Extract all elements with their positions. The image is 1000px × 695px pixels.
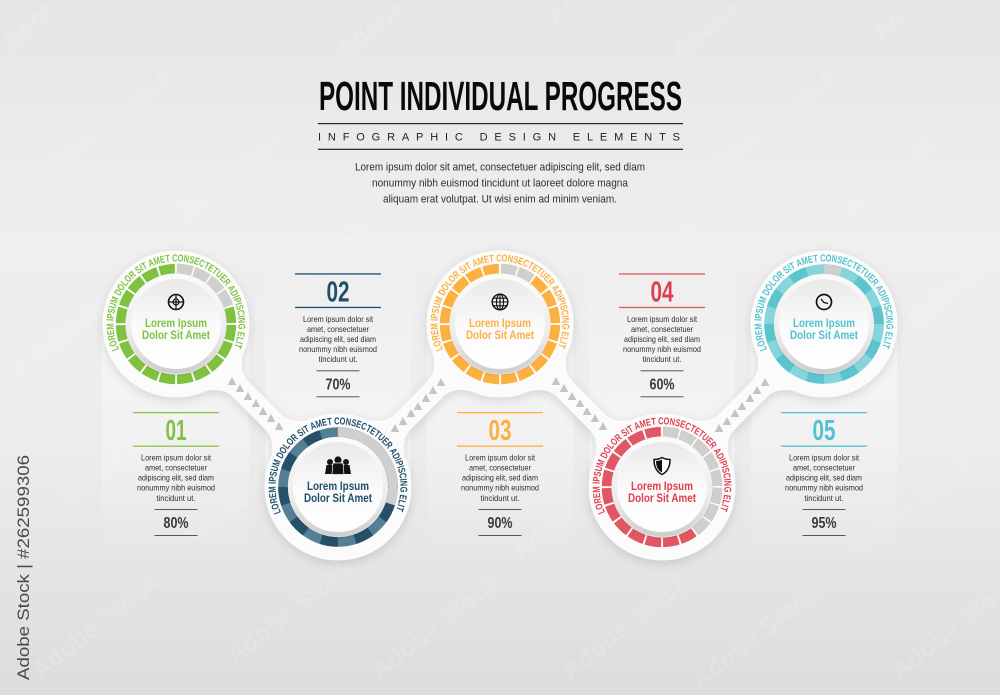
intro paragraph: nonummy nibh euismod tincidunt ut laoreet dolore magna [372, 178, 629, 190]
arrows: step 2 to 3 [391, 378, 445, 432]
watermark: Adobe Stock [836, 104, 974, 220]
hub [288, 438, 388, 536]
text block 05: 05 [812, 415, 836, 447]
text block 02: tincidunt ut. [318, 354, 358, 364]
white connector track and discs [102, 250, 898, 560]
hub label: Lorem Ipsum [145, 316, 207, 330]
text block 02: nonummy nibh euismod [299, 344, 377, 354]
intro paragraph: Lorem ipsum dolor sit amet, consectetuer adipiscing elit, sed diam [355, 162, 645, 174]
text block 01: adipiscing elit, sed diam [138, 473, 214, 483]
curved caption: LOREM IPSUM DOLOR SIT AMET CONSECTETUER ADIPISCING ELIT [754, 254, 894, 352]
progress ring 95% [769, 269, 879, 379]
hub label: Lorem Ipsum [307, 479, 369, 493]
text block 02 [295, 273, 381, 397]
text block 03: 03 [488, 415, 512, 447]
text block 04: adipiscing elit, sed diam [624, 334, 700, 344]
text block 01: tincidunt ut. [156, 493, 196, 503]
text block 05: 95% [812, 515, 836, 532]
watermark: Adobe Stock [221, 554, 359, 670]
text block 03: Lorem ipsum dolor sit [465, 453, 536, 463]
text block 05: nonummy nibh euismod [785, 483, 863, 493]
icon: globe [492, 294, 508, 310]
text block 02: 02 [326, 276, 350, 308]
text block 02: Lorem ipsum dolor sit [303, 314, 374, 324]
column panels [102, 250, 897, 564]
intro paragraph [355, 162, 645, 206]
stock id side label: Adobe Stock | #262599306 [14, 455, 33, 680]
text block 05: tincidunt ut. [804, 493, 844, 503]
hub label [628, 479, 696, 505]
text block 05: Lorem ipsum dolor sit [789, 453, 860, 463]
text block 04: Lorem ipsum dolor sit [627, 314, 698, 324]
text block 04: 60% [650, 376, 674, 393]
watermark: Adobe Stock [171, 109, 309, 225]
text block 05 [781, 412, 867, 536]
hub label: Lorem Ipsum [631, 479, 693, 493]
hub [774, 274, 874, 374]
watermark: Adobe Stock [41, 64, 179, 180]
text block 01: 80% [164, 515, 188, 532]
text block 02: adipiscing elit, sed diam [300, 334, 376, 344]
icon: clock [816, 294, 832, 310]
hub label: Dolor Sit Amet [142, 328, 210, 342]
hub [612, 438, 712, 536]
text block 04: 04 [650, 276, 674, 308]
watermark: Adobe Stock [366, 569, 504, 685]
curved caption: LOREM IPSUM DOLOR SIT AMET CONSECTETUER ADIPISCING ELIT [268, 417, 408, 515]
text block 02: amet, consectetuer [307, 324, 369, 334]
text block 02: 70% [326, 376, 350, 393]
progress ring 70% [283, 432, 393, 542]
text block 04: nonummy nibh euismod [623, 344, 701, 354]
text block 03: adipiscing elit, sed diam [462, 473, 538, 483]
step 3 gauge [430, 254, 570, 384]
text block 03: tincidunt ut. [480, 493, 520, 503]
curved caption: LOREM IPSUM DOLOR SIT AMET CONSECTETUER ADIPISCING ELIT [106, 254, 246, 352]
step 1 gauge [106, 254, 246, 384]
text block 03: 90% [488, 515, 512, 532]
subtitle with rules: INFOGRAPHIC DESIGN ELEMENTS [318, 132, 680, 144]
icon: shield [654, 458, 670, 474]
watermark: Adobe Stock [841, 449, 979, 565]
curved caption: LOREM IPSUM DOLOR SIT AMET CONSECTETUER ADIPISCING ELIT [430, 254, 570, 352]
watermark: Adobe Stock [506, 449, 644, 565]
text block 04 [619, 273, 705, 397]
watermark: Adobe Stock [176, 439, 314, 555]
watermark: Adobe Stock [26, 569, 164, 685]
hub label: Lorem Ipsum [793, 316, 855, 330]
curved caption: LOREM IPSUM DOLOR SIT AMET CONSECTETUER ADIPISCING ELIT [592, 417, 732, 515]
watermark: Adobe Stock [706, 64, 844, 180]
watermark: Adobe Stock [51, 399, 189, 515]
hub label: Dolor Sit Amet [304, 491, 372, 505]
progress ring 60% [607, 432, 717, 542]
hub label: Dolor Sit Amet [790, 328, 858, 342]
icon: people [325, 456, 351, 474]
text block 01 [133, 412, 219, 536]
watermark: Adobe Stock [236, 219, 374, 335]
hub label: Lorem Ipsum [469, 316, 531, 330]
title: POINT INDIVIDUAL PROGRESS [319, 73, 682, 119]
hub label [304, 479, 372, 505]
watermark: Adobe Stock [6, 269, 144, 385]
arrows: step 1 to 2 [228, 377, 283, 430]
hub label [466, 316, 534, 342]
watermark: Adobe Stock [686, 579, 824, 695]
text block 01: Lorem ipsum dolor sit [141, 453, 212, 463]
text block 03: nonummy nibh euismod [461, 483, 539, 493]
arrows: step 3 to 4 [552, 377, 607, 430]
text block 01: amet, consectetuer [145, 463, 207, 473]
progress ring 80% [121, 269, 231, 379]
text block 04: amet, consectetuer [631, 324, 693, 334]
text block 03: amet, consectetuer [469, 463, 531, 473]
step 5 gauge [754, 254, 894, 384]
intro paragraph: aliquam erat volutpat. Ut wisi enim ad minim veniam. [383, 194, 617, 206]
hub [450, 274, 550, 374]
text block 01: nonummy nibh euismod [137, 483, 215, 493]
hub label: Dolor Sit Amet [628, 491, 696, 505]
progress ring 90% [445, 269, 555, 379]
text block 04: tincidunt ut. [642, 354, 682, 364]
step 4 gauge [592, 417, 732, 548]
arrows: step 4 to 5 [715, 378, 769, 432]
hub [126, 274, 226, 374]
hub label: Dolor Sit Amet [466, 328, 534, 342]
watermark: Adobe Stock [556, 569, 694, 685]
hub label [790, 316, 858, 342]
watermark: Adobe Stock [566, 219, 704, 335]
icon: compass [168, 294, 184, 310]
text block 05: amet, consectetuer [793, 463, 855, 473]
text block 01: 01 [166, 415, 186, 447]
text block 05: adipiscing elit, sed diam [786, 473, 862, 483]
step 2 gauge [268, 417, 408, 547]
text block 03 [457, 412, 543, 536]
hub label [142, 316, 210, 342]
